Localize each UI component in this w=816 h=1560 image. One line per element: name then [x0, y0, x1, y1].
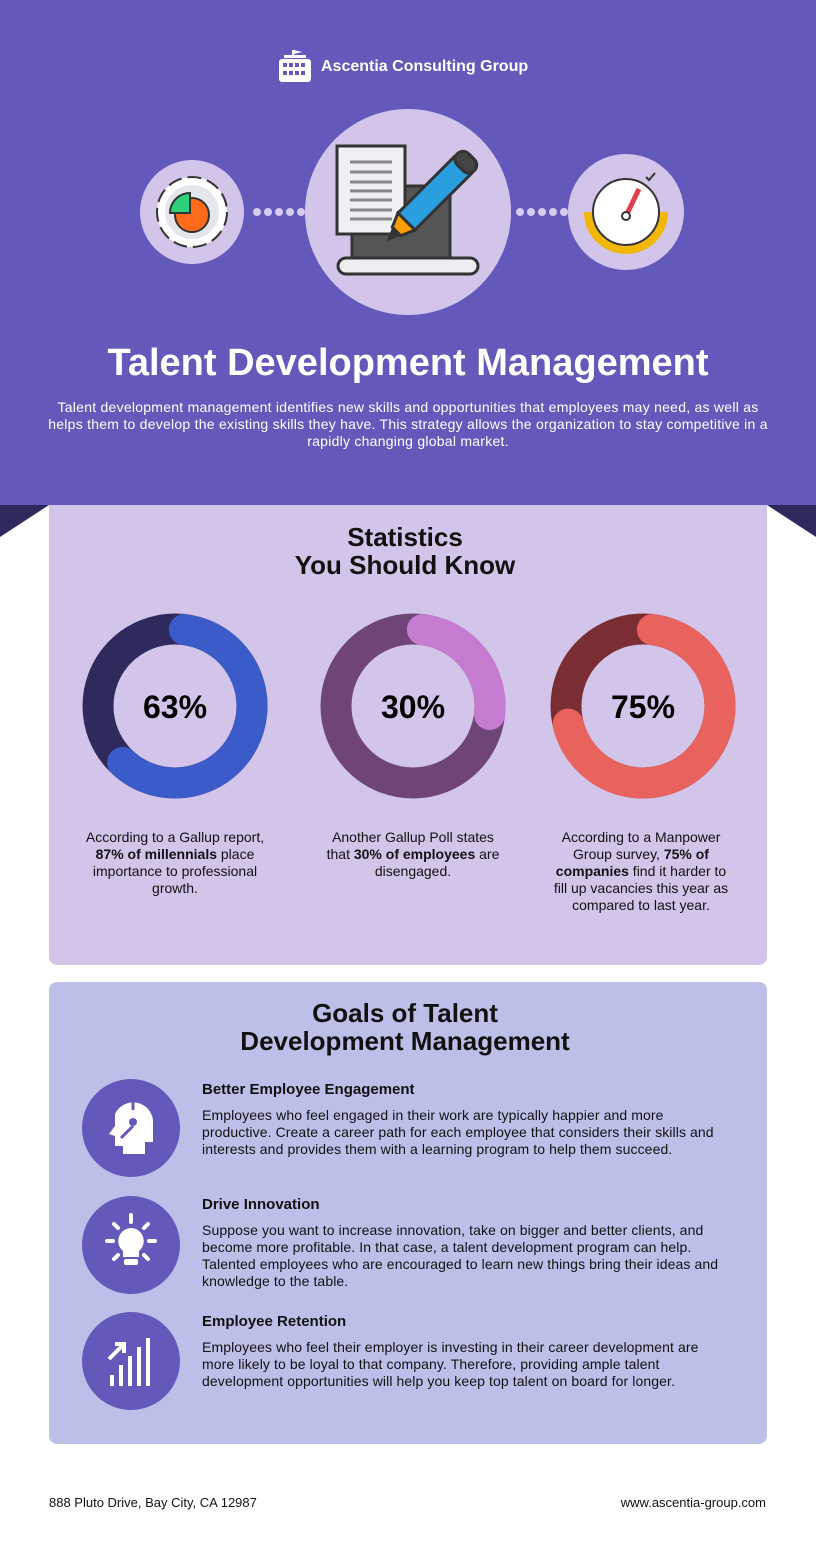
logo	[279, 50, 528, 82]
title: Talent Development Management	[107, 342, 709, 384]
logo: Ascentia Consulting Group	[321, 58, 528, 75]
goals heading: Development Management	[240, 1026, 570, 1056]
stats heading	[295, 522, 516, 580]
icon: headset head	[82, 1079, 180, 1177]
goal 1: Employees who feel engaged in their work are typically happier and more productive. Create a career path for each employee that considers their skills and interests and provides them with a learning program to help them succeed.	[202, 1107, 714, 1157]
donut charts	[82, 614, 736, 798]
stat 3 text: According to a Manpower Group survey, 75% of companies find it harder to fill up vacancies this year as compared to last year.	[554, 829, 728, 913]
goal 2	[82, 1196, 718, 1294]
stat 1 text: According to a Gallup report, 87% of millennials place importance to professional growth.	[86, 829, 264, 896]
goal 3	[82, 1312, 698, 1410]
goals heading	[240, 998, 570, 1056]
footer website: www.ascentia-group.com	[621, 1495, 766, 1510]
icon: lightbulb	[82, 1196, 180, 1294]
intro text: Talent development management identifies new skills and opportunities that employees may need, as well as helps them to develop the existing skills they have. This strategy allows the organization to stay competitive in a rapidly changing global market.	[48, 399, 768, 449]
donut charts: 30%	[381, 689, 445, 725]
goal 1	[82, 1079, 714, 1177]
goal 2: Suppose you want to increase innovation, take on bigger and better clients, and become more profitable. In that case, a talent development program can help. Talented employees who are encouraged to learn new things bring their ideas and knowledge to the table.	[202, 1222, 718, 1289]
stats heading: You Should Know	[295, 550, 515, 580]
hero icons	[140, 109, 684, 315]
panel: goals	[49, 982, 767, 1444]
footer address: 888 Pluto Drive, Bay City, CA 12987	[49, 1495, 257, 1510]
panel: statistics	[49, 505, 767, 965]
dots	[253, 208, 568, 216]
goal 2: Drive Innovation	[202, 1196, 320, 1213]
icon: growth bars	[82, 1312, 180, 1410]
donut charts: 75%	[611, 689, 675, 725]
goals heading: Goals of Talent	[312, 998, 498, 1028]
icon: gauge	[568, 154, 684, 270]
goal 3: Employee Retention	[202, 1313, 346, 1330]
header background	[0, 0, 816, 505]
goal 3: Employees who feel their employer is investing in their career development are more likely to be loyal to that company. Therefore, providing ample talent development opportunities will help you keep top talent on board for longer.	[202, 1339, 698, 1389]
stats heading: Statistics	[347, 522, 463, 552]
icon: laptop and pen	[305, 109, 511, 315]
icon: gear chart	[140, 160, 244, 264]
stat 2 text: Another Gallup Poll states that 30% of employees are disengaged.	[327, 829, 499, 879]
corner triangles	[0, 505, 816, 537]
icon: building	[279, 50, 311, 82]
goal 1: Better Employee Engagement	[202, 1081, 415, 1098]
donut charts: 63%	[143, 689, 207, 725]
